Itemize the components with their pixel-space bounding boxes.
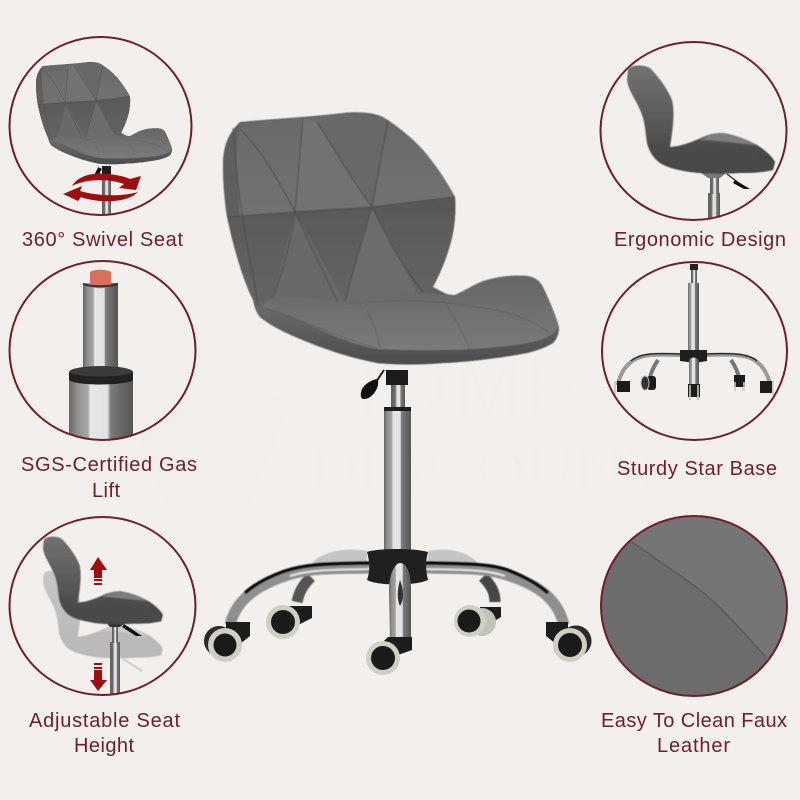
star base photo: [615, 264, 773, 400]
circle frame: [602, 262, 787, 440]
panel: adjustable seat height: [10, 517, 196, 757]
side profile photo: [627, 66, 775, 223]
seat shell: [223, 112, 559, 364]
circle frame: [10, 261, 196, 440]
panel: faux leather: [600, 515, 790, 757]
icon: rotation arrows: [63, 174, 141, 201]
back star base arms: [297, 550, 495, 602]
circle frame: [601, 516, 787, 696]
caster back right: [454, 605, 501, 637]
icon: up arrow: [90, 557, 107, 585]
label: 360° Swivel Seat: [22, 229, 183, 251]
gas lift column: [384, 370, 411, 552]
casters row: [617, 375, 772, 397]
caster left: [204, 622, 250, 662]
circle frame: [600, 42, 786, 220]
label line 1: Easy To Clean Faux: [601, 710, 787, 732]
casters: [204, 605, 592, 675]
main chair: [204, 112, 592, 675]
icon: down arrow: [90, 663, 107, 691]
side star base arms: [230, 563, 564, 625]
label line 2: Leather: [657, 735, 730, 757]
height photo: [43, 537, 163, 698]
label: Sturdy Star Base: [617, 458, 777, 480]
caster back left: [266, 605, 312, 639]
swivel photo: [36, 62, 172, 218]
front arm: [389, 563, 411, 640]
label line 1: Adjustable Seat: [29, 710, 180, 732]
panel: sturdy star base: [602, 262, 787, 480]
label line 1: SGS-Certified Gas: [21, 454, 197, 476]
caster right: [546, 622, 592, 662]
height lever: [361, 370, 384, 399]
leather swatch: [600, 515, 790, 700]
watermark: Home Discount logo: HOME: [322, 344, 588, 432]
label: Ergonomic Design: [614, 229, 786, 251]
circle frame: [10, 37, 192, 215]
caster front: [366, 637, 412, 675]
watermark: Home Discount logo: [130, 335, 668, 515]
panel: ergonomic design: [600, 42, 786, 251]
watermark: Home Discount logo: DISCOUNT: [312, 435, 668, 504]
panel: 360 swivel seat: [10, 37, 192, 251]
label line 2: Lift: [92, 480, 120, 502]
hub: [367, 549, 428, 584]
gas lift photo: [69, 270, 133, 443]
panel: gas lift: [10, 261, 197, 502]
label line 2: Height: [74, 735, 134, 757]
circle frame: [10, 517, 196, 695]
